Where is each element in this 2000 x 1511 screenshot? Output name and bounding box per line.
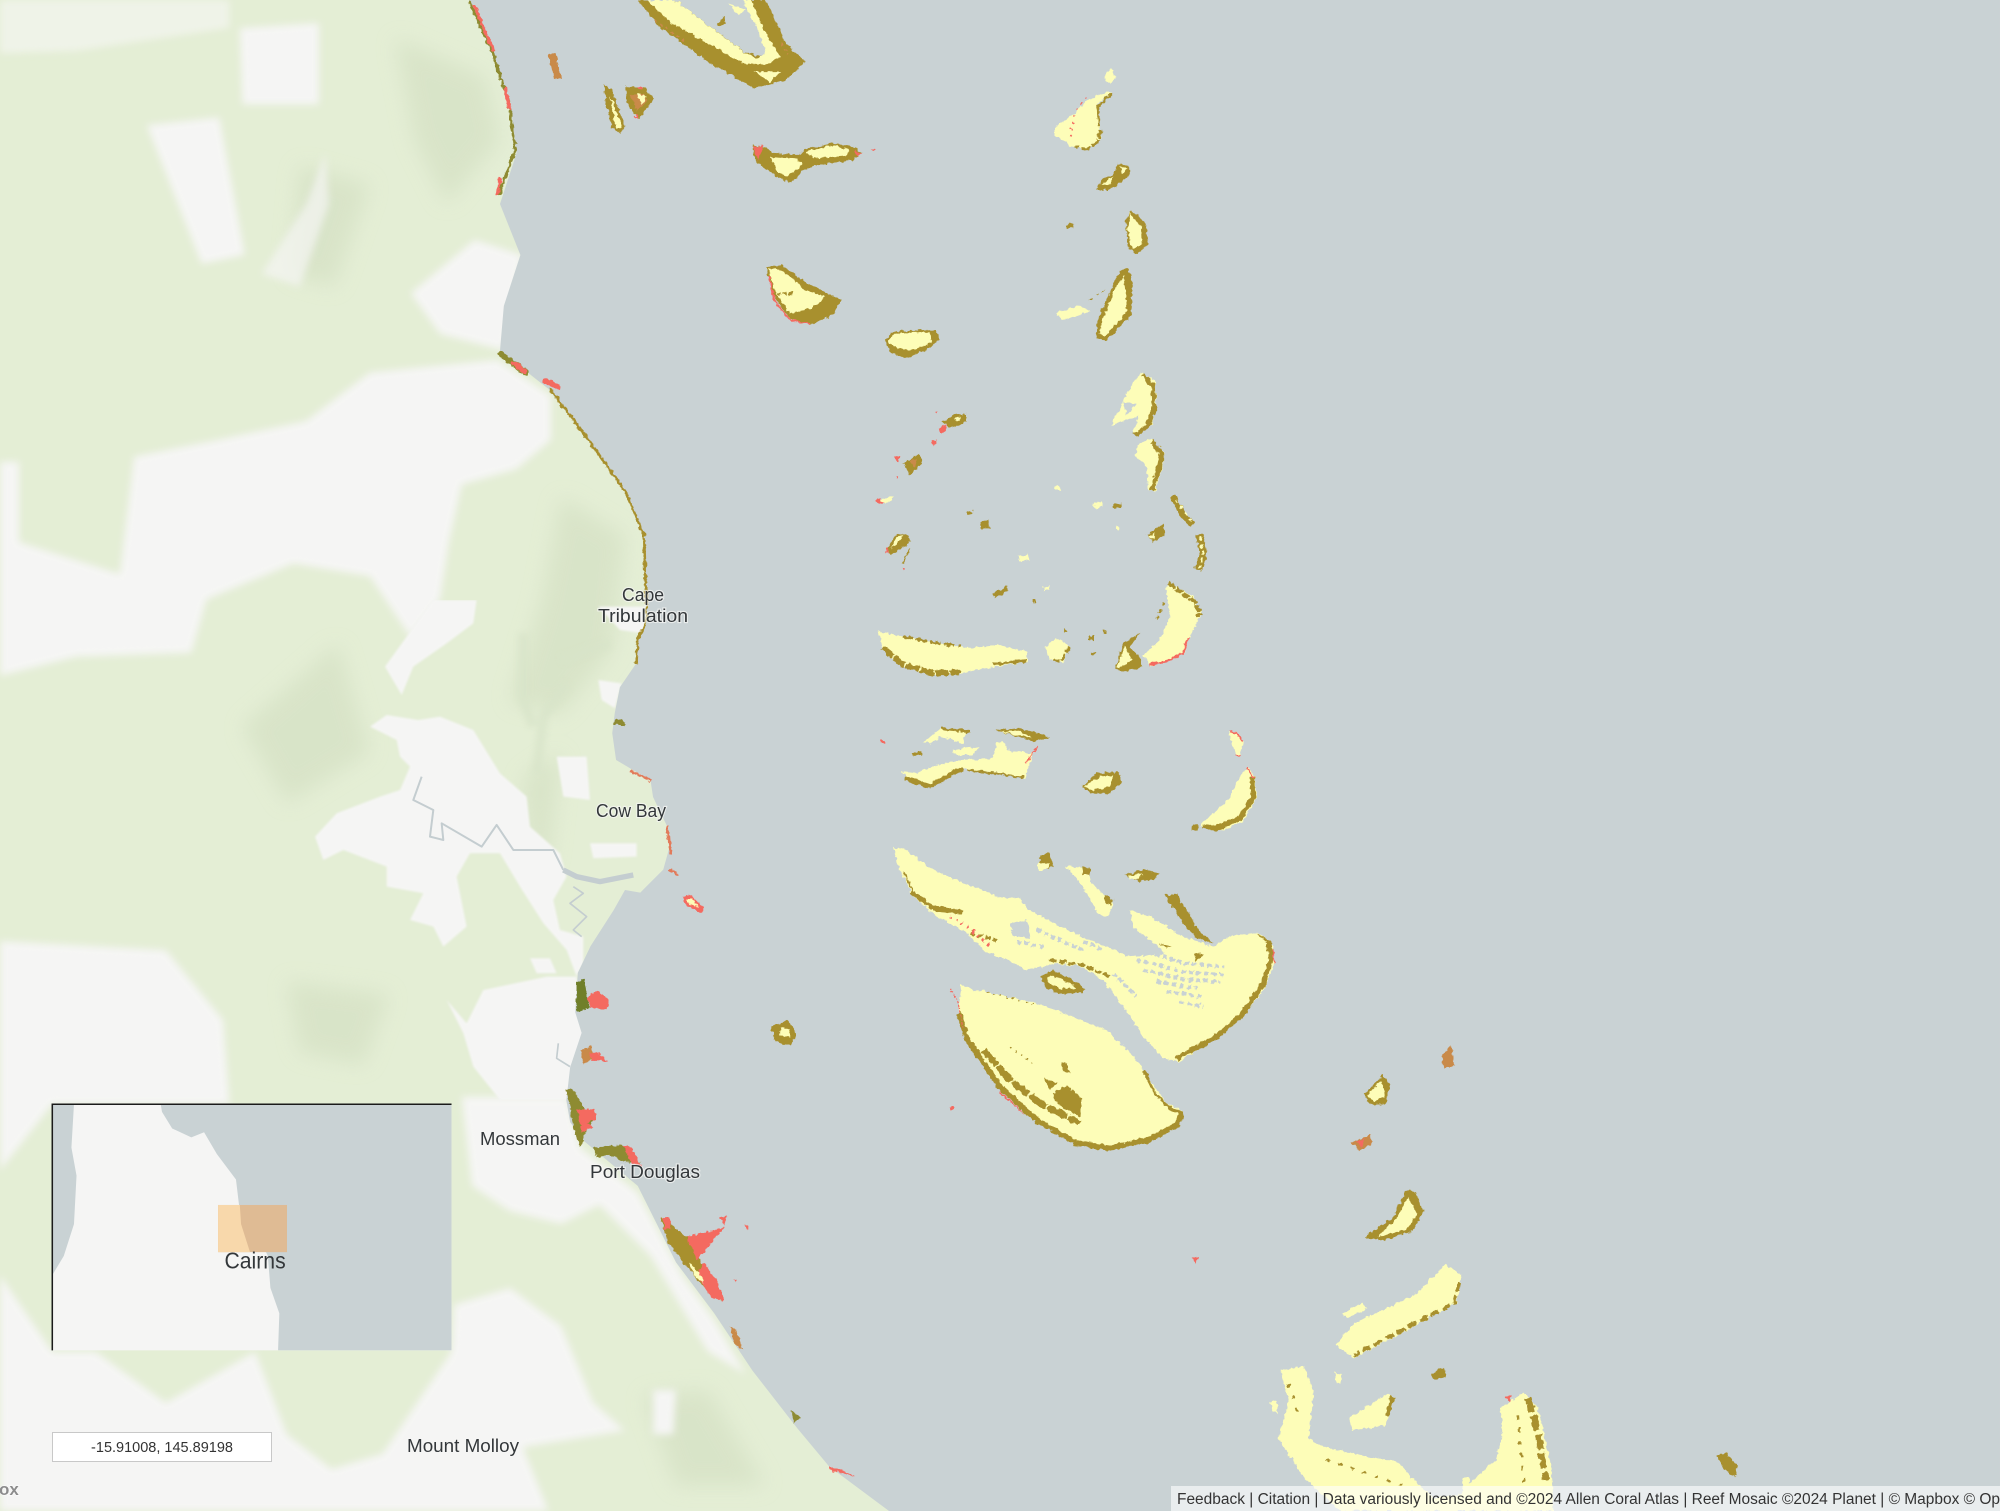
reef: large southern lobe of the main complex bbox=[950, 985, 1183, 1150]
reef: north-east cluster bbox=[1054, 68, 1149, 255]
reef: south-east crescent bbox=[1365, 1190, 1423, 1241]
reef: isolated inshore patch bbox=[770, 1020, 797, 1046]
reefs: north group bbox=[604, 0, 1149, 358]
reef: bottom large reef bbox=[1270, 1367, 1554, 1511]
reefs: south-east group bbox=[566, 895, 1737, 1511]
reef: small inshore speck north bbox=[548, 53, 561, 79]
water with coastline bbox=[469, 0, 2000, 1511]
attribution bar: Feedback | Citation | Data variously licensed and ©2024 Allen Coral Atlas | Reef Mosaic ©2024 Planet | © Mapbox © Op bbox=[1177, 1491, 2000, 1508]
reef: eastern crescent bbox=[1191, 732, 1257, 831]
reef: outer thin strips bbox=[1147, 496, 1203, 570]
reef: small red-edged patch bbox=[886, 533, 910, 571]
cleared land around the Daintree River bbox=[315, 600, 647, 1100]
place label: Mossman: Mossman bbox=[480, 1129, 560, 1149]
reef: top U-shaped bbox=[637, 0, 805, 88]
reef: inshore south-east patches bbox=[1191, 1046, 1454, 1264]
hill shading bbox=[242, 38, 765, 1485]
reef: north-east crescent bbox=[1056, 268, 1132, 341]
reef: small oval bbox=[884, 330, 939, 358]
place label: Cow Bay: Cow Bay bbox=[596, 801, 666, 821]
reef: long central reef bbox=[878, 632, 1070, 675]
cleared land patches bbox=[0, 0, 746, 1511]
ridge shading near the coast bbox=[523, 633, 610, 773]
reefs: coastal patches near Mossman and Port Douglas bbox=[566, 979, 857, 1477]
inset label: Cairns: Cairns bbox=[224, 1248, 286, 1274]
coastal reef strips bbox=[469, 3, 679, 875]
reef: elongated north reef bbox=[753, 143, 875, 183]
reef: far east speck bbox=[1717, 1452, 1737, 1477]
reef: small patches by the main complex bbox=[1038, 852, 1213, 994]
reef: central-east crescent bbox=[1115, 582, 1202, 672]
rivers bbox=[413, 777, 633, 1067]
attribution bar bbox=[1171, 1486, 2000, 1511]
place label: Cape Tribulation: Tribulation bbox=[598, 606, 688, 626]
reef: islet off Cow Bay bbox=[682, 895, 704, 913]
reef: round mid-north bbox=[766, 265, 842, 325]
reef: south-east elongated bbox=[1335, 1265, 1462, 1358]
reef: outer north reef bbox=[1112, 372, 1157, 437]
inset locator map bbox=[52, 1104, 452, 1350]
inset extent rectangle bbox=[218, 1205, 287, 1252]
reef: large northern lobe of the main complex bbox=[893, 847, 1275, 1062]
place label: Port Douglas: Port Douglas bbox=[590, 1162, 700, 1182]
reef: broken central reef bbox=[880, 728, 1050, 788]
reefs: central group bbox=[874, 372, 1257, 831]
place label: Cape Tribulation bbox=[598, 585, 688, 626]
coordinates box bbox=[52, 1432, 272, 1462]
reef: small mid patch bbox=[1082, 772, 1122, 793]
reef: small northern patches bbox=[604, 83, 654, 133]
place label: Cape Tribulation: Cape bbox=[622, 585, 664, 605]
reef: small scattered patches bbox=[874, 412, 1122, 655]
coordinates box: -15.91008, 145.89198 bbox=[91, 1440, 233, 1456]
reef: outer second reef bbox=[1135, 439, 1165, 492]
place label: Mount Molloy: Mount Molloy bbox=[407, 1436, 519, 1456]
